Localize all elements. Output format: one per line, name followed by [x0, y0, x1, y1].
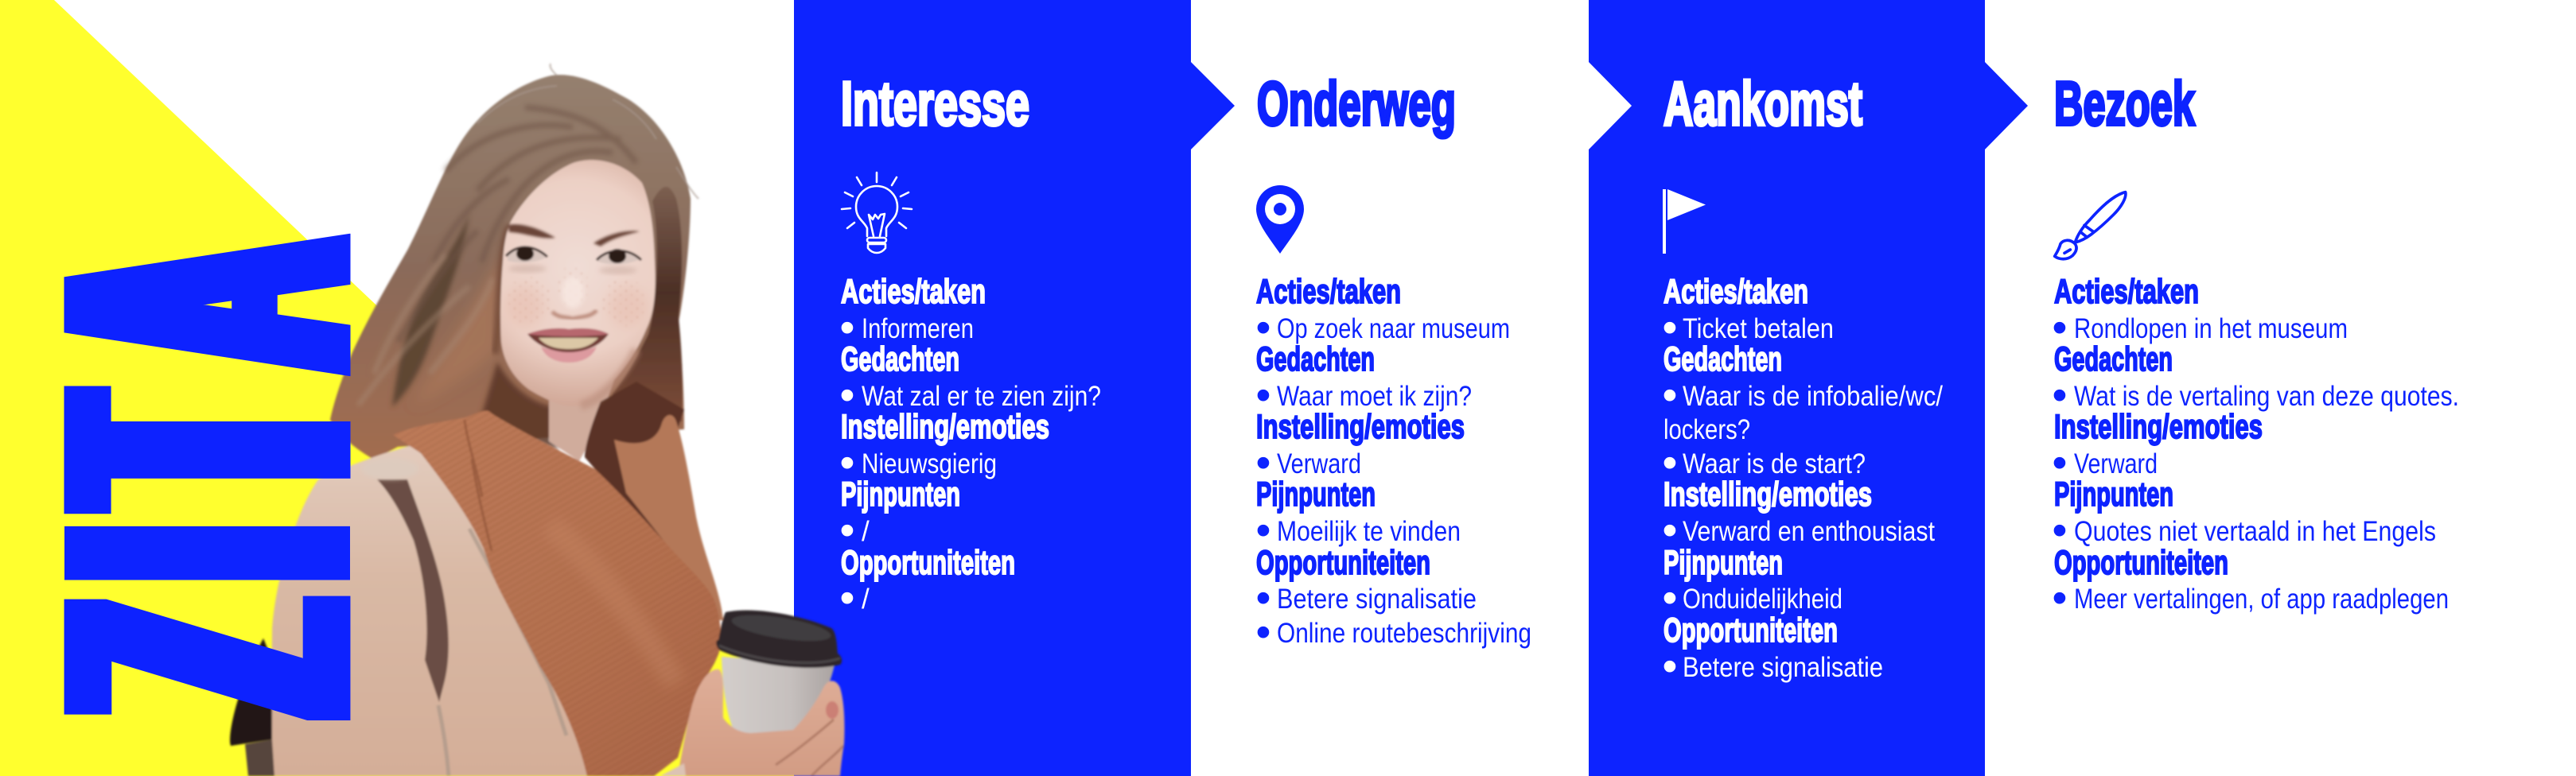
section: Pijnpunten [2053, 475, 2436, 554]
section: Pijnpunten: • [1663, 574, 1677, 622]
section: Acties/taken: Ticket betalen [1683, 313, 1834, 344]
section: Instelling/emoties: Instelling/emoties [2054, 408, 2263, 446]
section: Instelling/emoties: Instelling/emoties [841, 408, 1049, 446]
section: Gedachten: Gedachten [1256, 340, 1375, 378]
section: Gedachten: Gedachten [2054, 340, 2173, 378]
section: Pijnpunten: / [862, 516, 870, 547]
section: Gedachten: • [1256, 371, 1270, 419]
section: Instelling/emoties: • [1663, 506, 1677, 554]
section: Acties/taken: Acties/taken [1664, 273, 1808, 311]
icon: location pin [1256, 185, 1304, 254]
section: Pijnpunten [840, 475, 960, 554]
section: Opportuniteiten: • [1256, 608, 1270, 656]
section: Instelling/emoties [1663, 475, 1935, 554]
section: Gedachten [2053, 340, 2459, 419]
section: Opportuniteiten: / [862, 584, 870, 615]
panel background with arrow [794, 0, 1235, 776]
section: Acties/taken: • [840, 304, 854, 351]
section: Pijnpunten: Pijnpunten [1664, 544, 1783, 582]
heading: Onderweg: Onderweg [1257, 68, 1456, 138]
section: Opportuniteiten: Opportuniteiten [1256, 544, 1430, 582]
section: Pijnpunten: Pijnpunten [2054, 475, 2173, 514]
section: Gedachten: lockers? [1664, 414, 1750, 445]
section: Acties/taken [1663, 273, 1834, 351]
main scarf [393, 411, 721, 776]
hair [330, 64, 698, 460]
section: Acties/taken: • [1663, 304, 1677, 351]
section: Pijnpunten: Pijnpunten [841, 475, 960, 514]
nose [552, 277, 597, 319]
section: Opportuniteiten: Online routebeschrijving [1277, 618, 1531, 649]
neck [549, 374, 617, 461]
section: Pijnpunten: Quotes niet vertaald in het Engels [2074, 516, 2436, 547]
section: Opportuniteiten: • [840, 574, 854, 622]
section: Instelling/emoties: Instelling/emoties [1664, 475, 1872, 514]
section: Opportuniteiten: Betere signalisatie [1683, 652, 1883, 683]
section: Gedachten: Wat is de vertaling van deze quotes. [2074, 381, 2459, 412]
hair tuft on shoulder [361, 459, 418, 479]
heading: Interesse: Interesse [841, 68, 1029, 138]
icon: light bulb [842, 173, 912, 253]
yellow background triangle [0, 0, 874, 776]
section: Instelling/emoties: • [840, 439, 854, 487]
portrait: woman with coffee cup [230, 64, 844, 776]
section: Pijnpunten [1663, 544, 1843, 622]
hand holding cup [660, 669, 844, 776]
section: Gedachten: • [1663, 439, 1677, 487]
section: Opportuniteiten: • [1256, 574, 1270, 622]
panel: Onderweg [1256, 68, 1531, 656]
section: Gedachten [840, 340, 1101, 419]
section: Acties/taken: Acties/taken [1256, 273, 1401, 311]
smile [527, 328, 609, 363]
section: Acties/taken: • [1256, 304, 1270, 351]
section: Pijnpunten: Pijnpunten [1256, 475, 1376, 514]
section: Pijnpunten [1256, 475, 1461, 554]
coat folds [438, 529, 566, 776]
section: Opportuniteiten: Opportuniteiten [841, 544, 1015, 582]
coat [270, 441, 621, 776]
persona name: ZITA (vertical title) [0, 242, 438, 707]
section: Gedachten: Waar is de infobalie/wc/ [1683, 381, 1943, 412]
section: Pijnpunten: • [2053, 506, 2067, 554]
section: Instelling/emoties: Verward [1277, 448, 1361, 479]
panel: Bezoek [2053, 68, 2459, 622]
section: Instelling/emoties [1256, 408, 1465, 487]
section: Acties/taken [1256, 273, 1510, 351]
section: Acties/taken [2053, 273, 2348, 351]
section: Pijnpunten: • [1256, 506, 1270, 554]
section: Opportuniteiten [2053, 544, 2449, 622]
section: Acties/taken: Informeren [862, 313, 974, 344]
section: Acties/taken: Acties/taken [2054, 273, 2199, 311]
section: Acties/taken: Acties/taken [841, 273, 986, 311]
section: Gedachten: Gedachten [1664, 340, 1782, 378]
section: Gedachten: Gedachten [841, 340, 959, 378]
section: Acties/taken: Op zoek naar museum [1277, 313, 1510, 344]
bag [230, 638, 274, 776]
section: Opportuniteiten: • [2053, 574, 2067, 622]
section: Gedachten: • [1663, 371, 1677, 419]
section: Gedachten: • [2053, 371, 2067, 419]
section: Opportuniteiten: Opportuniteiten [1664, 611, 1838, 650]
section: Instelling/emoties [840, 408, 1049, 487]
section: Instelling/emoties: • [2053, 439, 2067, 487]
panel background with chevron notch and arrow [1589, 0, 2028, 776]
face [500, 160, 656, 406]
eyebrows [508, 224, 640, 246]
section: Pijnpunten: Moeilijk te vinden [1277, 516, 1461, 547]
section: Pijnpunten: Onduidelijkheid [1683, 584, 1843, 615]
shoulder strap [377, 479, 449, 702]
section: Instelling/emoties: Nieuwsgierig [862, 448, 997, 479]
icon: flag [1663, 189, 1706, 254]
eyes [506, 246, 641, 274]
icon: paint brush [2055, 192, 2126, 259]
section: Gedachten [1256, 340, 1472, 419]
section: Instelling/emoties: Verward en enthousiast [1683, 516, 1935, 547]
section: Gedachten: • [840, 371, 854, 419]
section: Opportuniteiten: Betere signalisatie [1277, 584, 1477, 615]
section: Opportuniteiten [1663, 611, 1883, 690]
section: Gedachten: Waar is de start? [1683, 448, 1866, 479]
section: Pijnpunten: • [840, 506, 854, 554]
section: Acties/taken: • [2053, 304, 2067, 351]
heading: Bezoek: Bezoek [2054, 68, 2195, 138]
section: Instelling/emoties [2053, 408, 2263, 487]
section: Gedachten [1663, 340, 1943, 487]
panel: Aankomst [1589, 0, 2028, 776]
heading: Aankomst: Aankomst [1664, 68, 1862, 138]
dark hair and shadow behind scarf [585, 382, 712, 604]
section: Instelling/emoties: Instelling/emoties [1256, 408, 1465, 446]
section: Opportuniteiten: • [1663, 642, 1677, 690]
section: Opportuniteiten: Opportuniteiten [2054, 544, 2228, 582]
section: Opportuniteiten: Meer vertalingen, of app raadplegen [2074, 584, 2449, 615]
section: Opportuniteiten [840, 544, 1015, 622]
section: Gedachten: Wat zal er te zien zijn? [862, 381, 1101, 412]
section: Instelling/emoties: • [1256, 439, 1270, 487]
section: Opportuniteiten [1256, 544, 1531, 656]
section: Acties/taken [840, 273, 986, 351]
scarf right fold [614, 415, 723, 620]
section: Gedachten: Waar moet ik zijn? [1277, 381, 1472, 412]
panel: Interesse [794, 0, 1235, 776]
section: Acties/taken: Rondlopen in het museum [2074, 313, 2348, 344]
section: Instelling/emoties: Verward [2074, 448, 2158, 479]
coffee cup [716, 610, 842, 735]
